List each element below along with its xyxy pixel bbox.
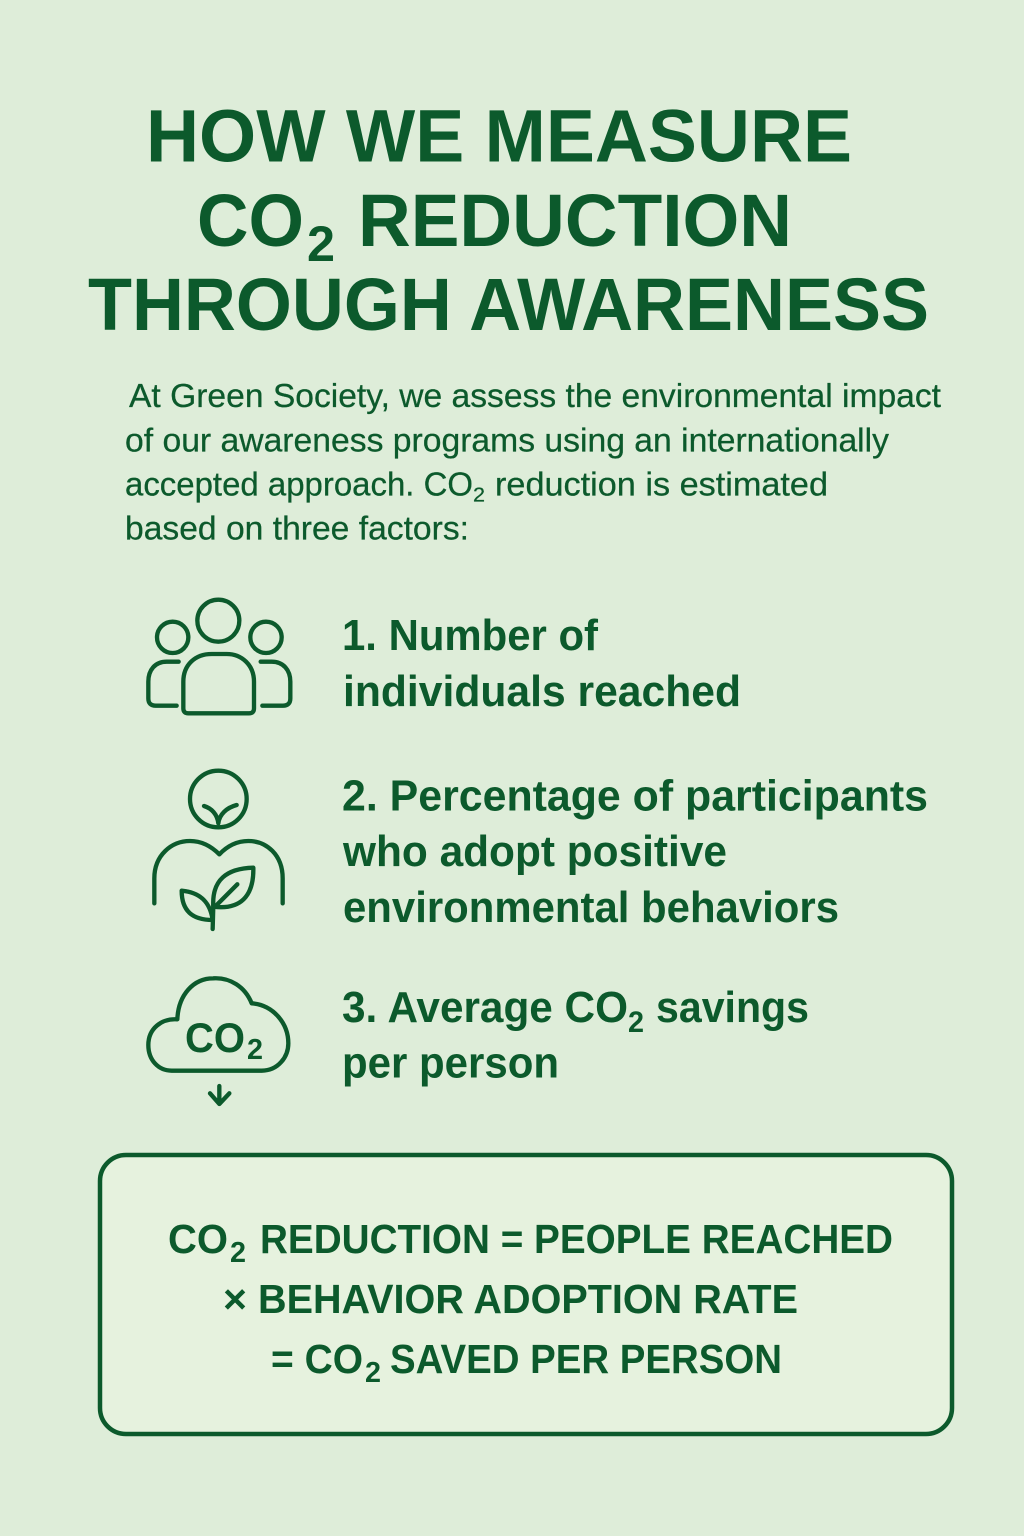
formula text: REDUCTION = PEOPLE REACHED [260,1216,893,1262]
step 1 label [342,611,741,716]
formula text [168,1216,893,1389]
step 3 label: savings [656,983,809,1032]
intro text block: 2 [473,484,485,506]
step 3 label: per person [342,1038,559,1088]
intro text block: accepted approach. CO [125,466,473,502]
formula text: 2 [230,1237,246,1269]
icon: CO2 cloud with down arrow [148,978,288,1104]
formula text: × [223,1276,247,1322]
icon: CO2 cloud with down arrow: CO [185,1014,245,1061]
intro text block: reduction is estimated [495,466,828,502]
title: REDUCTION [358,179,792,262]
icon: CO2 cloud with down arrow: 2 [247,1034,263,1066]
title: 2 [307,216,335,272]
formula text: CO [168,1216,228,1262]
title: CO [197,179,304,262]
title [88,94,929,346]
step 2 label: who adopt positive [342,827,727,876]
formula panel [100,1155,952,1434]
step 1 label: 1. Number of [342,611,598,660]
step 2 label: environmental behaviors [343,883,839,932]
intro text block: of our awareness programs using an internationally [125,422,890,458]
formula text: = CO [271,1336,363,1382]
formula box [100,1155,952,1434]
intro text block: based on three factors: [125,510,469,546]
formula text: BEHAVIOR ADOPTION RATE [258,1276,798,1322]
step 2 label: 2. Percentage of participants [342,772,928,820]
title: THROUGH AWARENESS [88,263,929,346]
step 3 label [342,983,809,1088]
step 3 label: 3. Average CO [342,983,628,1032]
intro text block: At Green Society, we assess the environmental impact [129,377,941,414]
intro text block [125,377,941,546]
step 2 label [342,772,928,932]
icon: group of people [148,600,290,713]
step 3 label: 2 [628,1006,644,1039]
title: HOW WE MEASURE [146,94,852,178]
icon: person with plant [154,771,283,929]
step 1 label: individuals reached [343,667,741,716]
formula text: 2 [365,1357,381,1389]
formula text: SAVED PER PERSON [390,1336,782,1382]
